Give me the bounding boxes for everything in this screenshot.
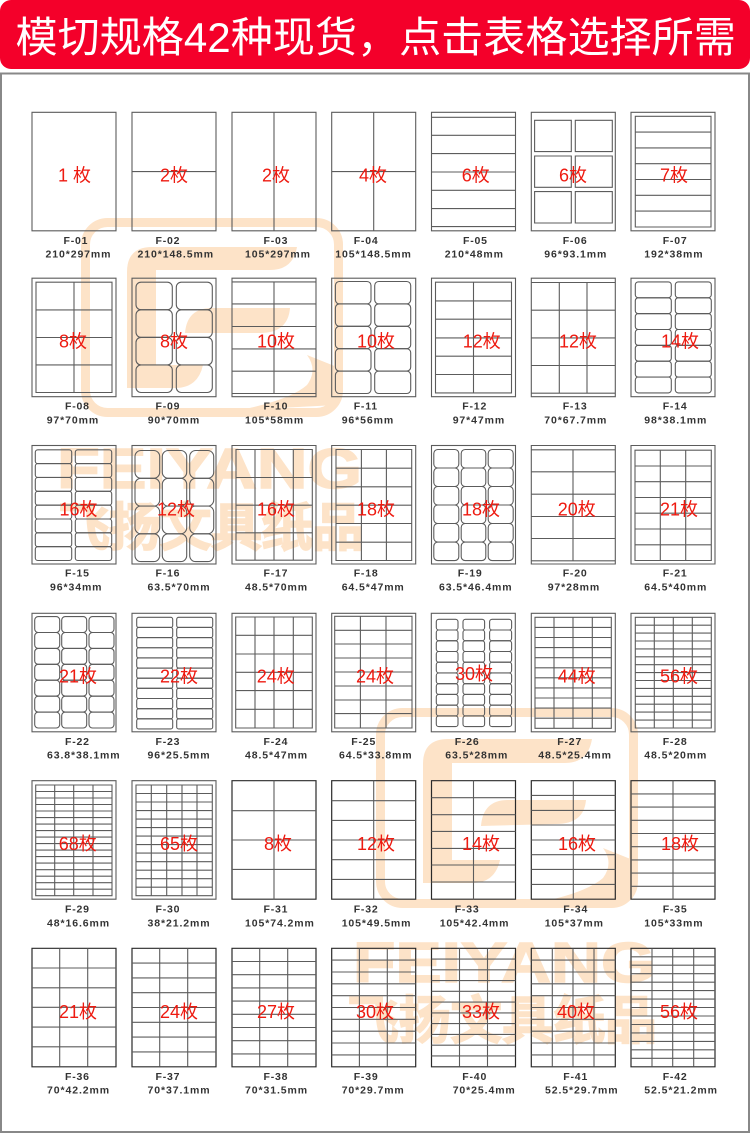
sheet F-34: 105*37mm bbox=[545, 917, 604, 929]
sheet F-41 bbox=[531, 948, 619, 1097]
sheet F-18 bbox=[332, 446, 416, 594]
sheet F-08: 97*70mm bbox=[47, 414, 99, 426]
sheet F-24: F-24 bbox=[264, 736, 288, 748]
sheet F-18: F-18 bbox=[354, 568, 378, 580]
sheet F-23: 22枚 bbox=[160, 667, 198, 687]
sheet F-42 bbox=[631, 948, 718, 1097]
sheet F-12: 12枚 bbox=[463, 332, 501, 352]
sheet F-21: 21枚 bbox=[660, 500, 698, 520]
sheet F-10: 105*58mm bbox=[245, 414, 304, 426]
sheet F-21 bbox=[631, 446, 715, 594]
sheet F-18: 64.5*47mm bbox=[342, 582, 405, 594]
sheet F-01: 1 枚 bbox=[58, 166, 91, 186]
sheet F-21: F-21 bbox=[663, 568, 687, 580]
sheet F-41: 40枚 bbox=[557, 1002, 595, 1022]
sheet F-02: F-02 bbox=[156, 235, 180, 247]
sheet F-06 bbox=[531, 112, 615, 261]
sheet F-28: 56枚 bbox=[660, 667, 698, 687]
sheet F-19 bbox=[432, 446, 516, 594]
sheet F-11: 96*56mm bbox=[342, 414, 394, 426]
sheet F-20: 97*28mm bbox=[548, 582, 600, 594]
sheet F-19: F-19 bbox=[458, 568, 482, 580]
sheet F-38: 70*31.5mm bbox=[245, 1085, 308, 1097]
sheet F-23: 96*25.5mm bbox=[148, 750, 210, 762]
sheet F-31 bbox=[232, 781, 316, 929]
sheet F-20: 20枚 bbox=[558, 500, 596, 520]
sheet F-21: 64.5*40mm bbox=[644, 582, 707, 594]
sheet F-36: 21枚 bbox=[59, 1002, 97, 1022]
sheet F-03: 2枚 bbox=[262, 166, 290, 186]
sheet F-33: F-33 bbox=[455, 903, 479, 915]
sheet F-22: F-22 bbox=[65, 736, 90, 748]
sheet F-10 bbox=[232, 278, 316, 426]
sheet F-05: 210*48mm bbox=[445, 249, 504, 261]
header banner bbox=[0, 0, 750, 69]
sheet F-14: F-14 bbox=[663, 400, 687, 412]
sheet F-01: 210*297mm bbox=[46, 249, 111, 261]
sheet F-40: F-40 bbox=[462, 1071, 487, 1083]
sheet F-14 bbox=[631, 278, 715, 426]
sheet F-20: F-20 bbox=[563, 568, 587, 580]
sheet F-15 bbox=[32, 446, 116, 594]
sheet F-23 bbox=[132, 613, 216, 762]
sheet F-23: F-23 bbox=[156, 736, 180, 748]
sheet F-31: 8枚 bbox=[264, 834, 292, 854]
sheet F-27: 44枚 bbox=[558, 667, 596, 687]
sheet F-01: F-01 bbox=[64, 235, 88, 247]
sheet F-19: 18枚 bbox=[462, 500, 500, 520]
sheet F-04: 4枚 bbox=[359, 166, 387, 186]
sheet F-15: F-15 bbox=[65, 568, 90, 580]
sheet F-32: 12枚 bbox=[357, 834, 395, 854]
sheet F-05: 6枚 bbox=[462, 166, 490, 186]
sheet F-16: 63.5*70mm bbox=[148, 582, 210, 594]
sheet F-31: 105*74.2mm bbox=[245, 917, 315, 929]
sheet F-35: 105*33mm bbox=[644, 917, 703, 929]
sheet F-13: F-13 bbox=[563, 400, 587, 412]
sheet F-42: 52.5*21.2mm bbox=[644, 1085, 718, 1097]
sheet F-26 bbox=[431, 613, 515, 762]
sheet F-29: F-29 bbox=[65, 903, 90, 915]
sheet F-37: 70*37.1mm bbox=[148, 1085, 210, 1097]
sheet F-03: F-03 bbox=[264, 235, 288, 247]
sheet F-10: 10枚 bbox=[257, 332, 295, 352]
sheet F-24 bbox=[232, 613, 316, 762]
sheet F-13: 12枚 bbox=[559, 332, 597, 352]
sheet F-28 bbox=[631, 613, 715, 762]
sheet F-19: 63.5*46.4mm bbox=[439, 582, 513, 594]
sheet F-32: 105*49.5mm bbox=[342, 917, 411, 929]
sheet F-11: F-11 bbox=[354, 400, 378, 412]
sheet F-27 bbox=[531, 613, 615, 762]
sheet F-39: F-39 bbox=[354, 1071, 378, 1083]
sheet F-09: 8枚 bbox=[160, 332, 188, 352]
sheet F-15: 16枚 bbox=[60, 500, 98, 520]
sheet F-07: F-07 bbox=[663, 235, 687, 247]
sheet F-28: F-28 bbox=[663, 736, 687, 748]
sheet F-25 bbox=[332, 613, 416, 762]
sheet F-42: F-42 bbox=[663, 1071, 687, 1083]
title: 模切规格42种现货，点击表格选择所需 bbox=[16, 14, 736, 61]
sheet F-04: F-04 bbox=[354, 235, 378, 247]
sheet F-26: 63.5*28mm bbox=[445, 750, 508, 762]
sheet F-20 bbox=[531, 446, 615, 594]
sheet F-07 bbox=[631, 112, 715, 261]
sheet F-38: F-38 bbox=[264, 1071, 288, 1083]
sheet F-40: 33枚 bbox=[462, 1002, 500, 1022]
sheet F-37: 24枚 bbox=[160, 1002, 198, 1022]
sheet F-28: 48.5*20mm bbox=[644, 750, 707, 762]
sheet F-05 bbox=[432, 112, 516, 261]
sheet F-33 bbox=[432, 781, 516, 929]
watermark: lower Chinese name: 飞扬文具纸品 bbox=[347, 993, 657, 1051]
sheet F-38: 27枚 bbox=[257, 1002, 295, 1022]
sheet F-25: F-25 bbox=[351, 736, 376, 748]
sheet F-39: 30枚 bbox=[356, 1002, 394, 1022]
watermark: lower logo bbox=[380, 712, 634, 904]
sheet F-02: 2枚 bbox=[160, 166, 188, 186]
sheet F-35: F-35 bbox=[663, 903, 687, 915]
sheet F-26: F-26 bbox=[455, 736, 479, 748]
sheet F-08 bbox=[32, 278, 116, 426]
sheet F-32: F-32 bbox=[354, 903, 378, 915]
watermark: upper logo bbox=[86, 222, 338, 412]
sheet F-22: 63.8*38.1mm bbox=[47, 750, 121, 762]
sheet F-31: F-31 bbox=[264, 903, 288, 915]
sheet F-22 bbox=[32, 613, 121, 762]
sheet F-10: F-10 bbox=[264, 400, 288, 412]
sheet F-14: 14枚 bbox=[661, 332, 699, 352]
sheet F-13: 70*67.7mm bbox=[544, 414, 607, 426]
sheet F-01 bbox=[32, 112, 116, 261]
sheet F-09: 90*70mm bbox=[148, 414, 200, 426]
banner red bar bbox=[0, 0, 750, 69]
sheet F-29: 48*16.6mm bbox=[47, 917, 110, 929]
sheet F-39: 70*29.7mm bbox=[342, 1085, 405, 1097]
sheet F-37: F-37 bbox=[156, 1071, 180, 1083]
watermark: upper Chinese name: 飞扬文具纸品 bbox=[58, 500, 364, 558]
sheet F-12: 97*47mm bbox=[453, 414, 505, 426]
sheet F-02: 210*148.5mm bbox=[138, 249, 214, 261]
sheet F-07: 7枚 bbox=[660, 166, 688, 186]
sheet F-35: 18枚 bbox=[661, 834, 699, 854]
sheet F-04 bbox=[332, 112, 416, 261]
sheet F-37 bbox=[132, 948, 216, 1097]
sheet F-16 bbox=[132, 446, 216, 594]
sheet F-17: 16枚 bbox=[257, 500, 295, 520]
sheet F-30 bbox=[132, 781, 216, 929]
sheet F-13 bbox=[531, 278, 615, 426]
sheet F-04: 105*148.5mm bbox=[335, 249, 412, 261]
sheet F-36 bbox=[32, 948, 116, 1097]
sheet F-24: 24枚 bbox=[257, 667, 295, 687]
sheet F-35 bbox=[631, 781, 715, 929]
sheet F-11: 10枚 bbox=[357, 332, 395, 352]
sheet F-33: 14枚 bbox=[462, 834, 500, 854]
sheet F-08: 8枚 bbox=[59, 332, 87, 352]
sheet F-17: 48.5*70mm bbox=[245, 582, 308, 594]
sheet F-25: 64.5*33.8mm bbox=[339, 750, 413, 762]
sheet F-34: 16枚 bbox=[558, 834, 596, 854]
sheet F-39 bbox=[332, 948, 416, 1097]
sheet F-17: F-17 bbox=[264, 568, 288, 580]
sheet F-17 bbox=[232, 446, 316, 594]
sheet F-27: 48.5*25.4mm bbox=[538, 750, 612, 762]
sheet F-06: F-06 bbox=[563, 235, 587, 247]
sheet F-29: 68枚 bbox=[59, 834, 97, 854]
sheet F-14: 98*38.1mm bbox=[644, 414, 707, 426]
sheet F-42: 56枚 bbox=[660, 1002, 698, 1022]
sheet F-38 bbox=[232, 948, 316, 1097]
sheet F-26: 30枚 bbox=[455, 664, 493, 684]
sheet F-02 bbox=[132, 112, 216, 261]
sheet F-09: F-09 bbox=[156, 400, 180, 412]
sheet F-41: F-41 bbox=[563, 1071, 588, 1083]
sheet F-08: F-08 bbox=[65, 400, 90, 412]
sheet F-03: 105*297mm bbox=[245, 249, 311, 261]
sheet F-06: 96*93.1mm bbox=[544, 249, 607, 261]
sheet F-36: F-36 bbox=[65, 1071, 90, 1083]
sheet F-07: 192*38mm bbox=[644, 249, 703, 261]
sheet F-11 bbox=[332, 278, 416, 426]
sheet F-34 bbox=[531, 781, 615, 929]
sheet F-33: 105*42.4mm bbox=[440, 917, 509, 929]
sheet F-30: F-30 bbox=[156, 903, 180, 915]
sheet F-05: F-05 bbox=[463, 235, 488, 247]
sheet F-09 bbox=[132, 278, 216, 426]
sheet F-40: 70*25.4mm bbox=[453, 1085, 516, 1097]
sheet F-40 bbox=[432, 948, 516, 1097]
sheet F-27: F-27 bbox=[557, 736, 582, 748]
sheet F-30: 38*21.2mm bbox=[148, 917, 210, 929]
sheet F-41: 52.5*29.7mm bbox=[545, 1085, 619, 1097]
sheet F-36: 70*42.2mm bbox=[47, 1085, 110, 1097]
sheet F-34: F-34 bbox=[563, 903, 588, 915]
sheet F-12: F-12 bbox=[462, 400, 487, 412]
sheet F-32 bbox=[332, 781, 416, 929]
sheet F-22: 21枚 bbox=[59, 667, 97, 687]
sheet F-25: 24枚 bbox=[356, 667, 394, 687]
watermark: upper brand name: FEIYANG bbox=[57, 437, 362, 501]
watermark: lower brand name: FEIYANG bbox=[353, 931, 655, 995]
sheet F-15: 96*34mm bbox=[50, 582, 102, 594]
sheet F-29 bbox=[32, 781, 116, 929]
sheet F-12 bbox=[432, 278, 516, 426]
sheet F-16: F-16 bbox=[156, 568, 180, 580]
sheet F-24: 48.5*47mm bbox=[245, 750, 308, 762]
sheet F-16: 12枚 bbox=[157, 500, 195, 520]
sheet F-30: 65枚 bbox=[160, 834, 198, 854]
sheet F-03 bbox=[232, 112, 316, 261]
sheet F-18: 18枚 bbox=[357, 500, 395, 520]
sheet F-06: 6枚 bbox=[559, 166, 587, 186]
